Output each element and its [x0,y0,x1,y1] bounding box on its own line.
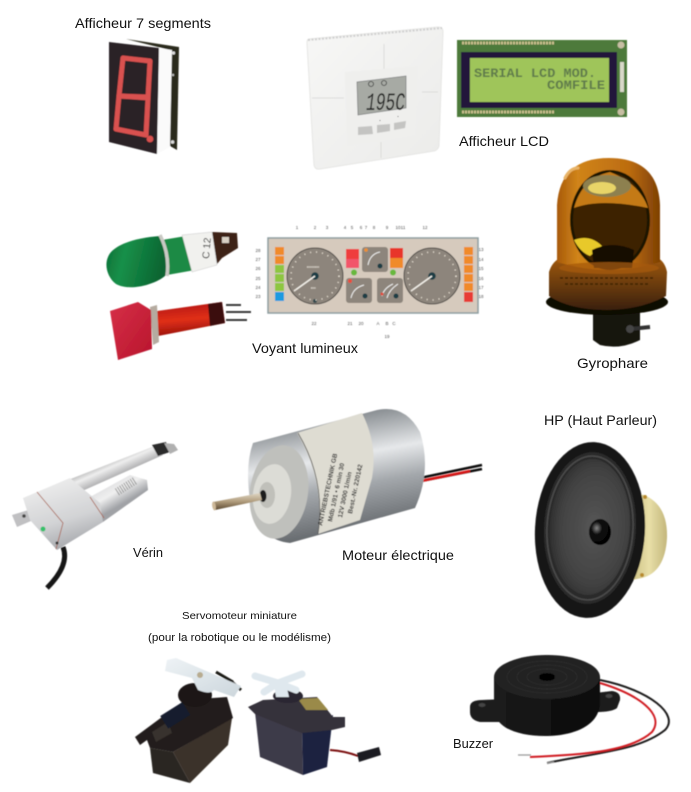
dashboard callout numbers: 17 [478,285,484,290]
LCD screen text [474,67,605,93]
warning lights [275,247,473,302]
dashboard callout numbers: 24 [255,285,261,290]
icon: rotating beacon [546,158,668,347]
dashboard callout numbers: 26 [255,266,261,271]
dashboard callout numbers [255,225,484,339]
speedometer dial [287,248,343,304]
icon: buzzer [470,655,669,763]
label: Vérin: Vérin [133,545,163,560]
dashboard callout numbers: 5 [351,225,354,230]
dashboard callout numbers: A [376,321,380,326]
dashboard callout numbers: 3 [326,225,329,230]
dashboard callout numbers: C [392,321,396,326]
label: Servomoteur miniature: Servomoteur miniature [182,610,297,622]
label: pour la robotique ou le modélisme: (pour la robotique ou le modélisme) [148,632,331,644]
icon: 7-segment display [109,39,179,154]
icon: black servo with white horn [135,658,241,783]
motor rating label text: ANTRIEBSTECHNIK GB [317,453,339,526]
icon: linear actuator [12,442,178,588]
dashboard callout numbers: 22 [311,321,317,326]
dashboard callout numbers: 8 [373,225,376,230]
dashboard callout numbers: 2 [314,225,317,230]
dashboard callout numbers: 10 [395,225,401,230]
dashboard callout numbers: 19 [384,334,390,339]
label: HP (Haut Parleur): HP (Haut Parleur) [544,412,657,428]
label: Moteur électrique: Moteur électrique [342,547,454,563]
dashboard callout numbers: 27 [255,257,261,262]
dashboard callout numbers: 21 [347,321,353,326]
dashboard callout numbers: 9 [386,225,389,230]
dashboard callout numbers: 4 [344,225,347,230]
dashboard callout numbers: 23 [255,294,261,299]
dashboard callout numbers: 28 [255,248,261,253]
label: Gyrophare: Gyrophare [577,355,648,371]
icon: LCD module [457,40,627,117]
dashboard callout numbers: 18 [478,294,484,299]
dashboard callout numbers: 11 [401,225,406,230]
label: Afficheur LCD: Afficheur LCD [459,133,549,149]
motor rating label text: 12V 3000 1/min [337,471,354,518]
dashboard callout numbers: 16 [478,276,484,281]
icon: green indicator light [106,232,238,287]
thermostat reading: 195C [366,89,405,118]
dashboard callout numbers: 15 [478,266,484,271]
icon: red indicator light [110,302,251,360]
motor rating label text: Best.-Nr. 220142 [347,463,364,514]
dashboard callout numbers: 20 [358,321,364,326]
dashboard callout numbers: 13 [478,247,484,252]
icon: green indicator light: C 12 [201,237,214,259]
icon: dark blue servo with cross horn [248,674,381,775]
label: Buzzer: Buzzer [453,737,493,751]
dashboard callout numbers: 25 [255,276,261,281]
motor rating label text: Mdb 1/91 • 6 min 30 [327,462,346,522]
dashboard callout numbers: 12 [422,225,428,230]
icon: loudspeaker [530,439,667,621]
icon: wall thermostat [307,27,443,169]
dashboard callout numbers: 6 [360,225,363,230]
LCD screen text: COMFILE [547,79,605,93]
icon: electric motor [211,409,482,543]
dashboard callout numbers: B [385,321,389,326]
dashboard callout numbers: 1 [296,225,299,230]
tachometer dial [404,248,460,304]
dashboard panel [255,225,484,339]
LCD screen text: SERIAL LCD MOD. [474,67,596,81]
label: Afficheur 7 segments: Afficheur 7 segments [75,15,211,31]
dashboard callout numbers: 7 [365,225,368,230]
label: Voyant lumineux: Voyant lumineux [252,340,358,356]
small gauges [346,247,403,303]
dashboard callout numbers: 14 [478,257,484,262]
motor rating label text [317,453,364,526]
